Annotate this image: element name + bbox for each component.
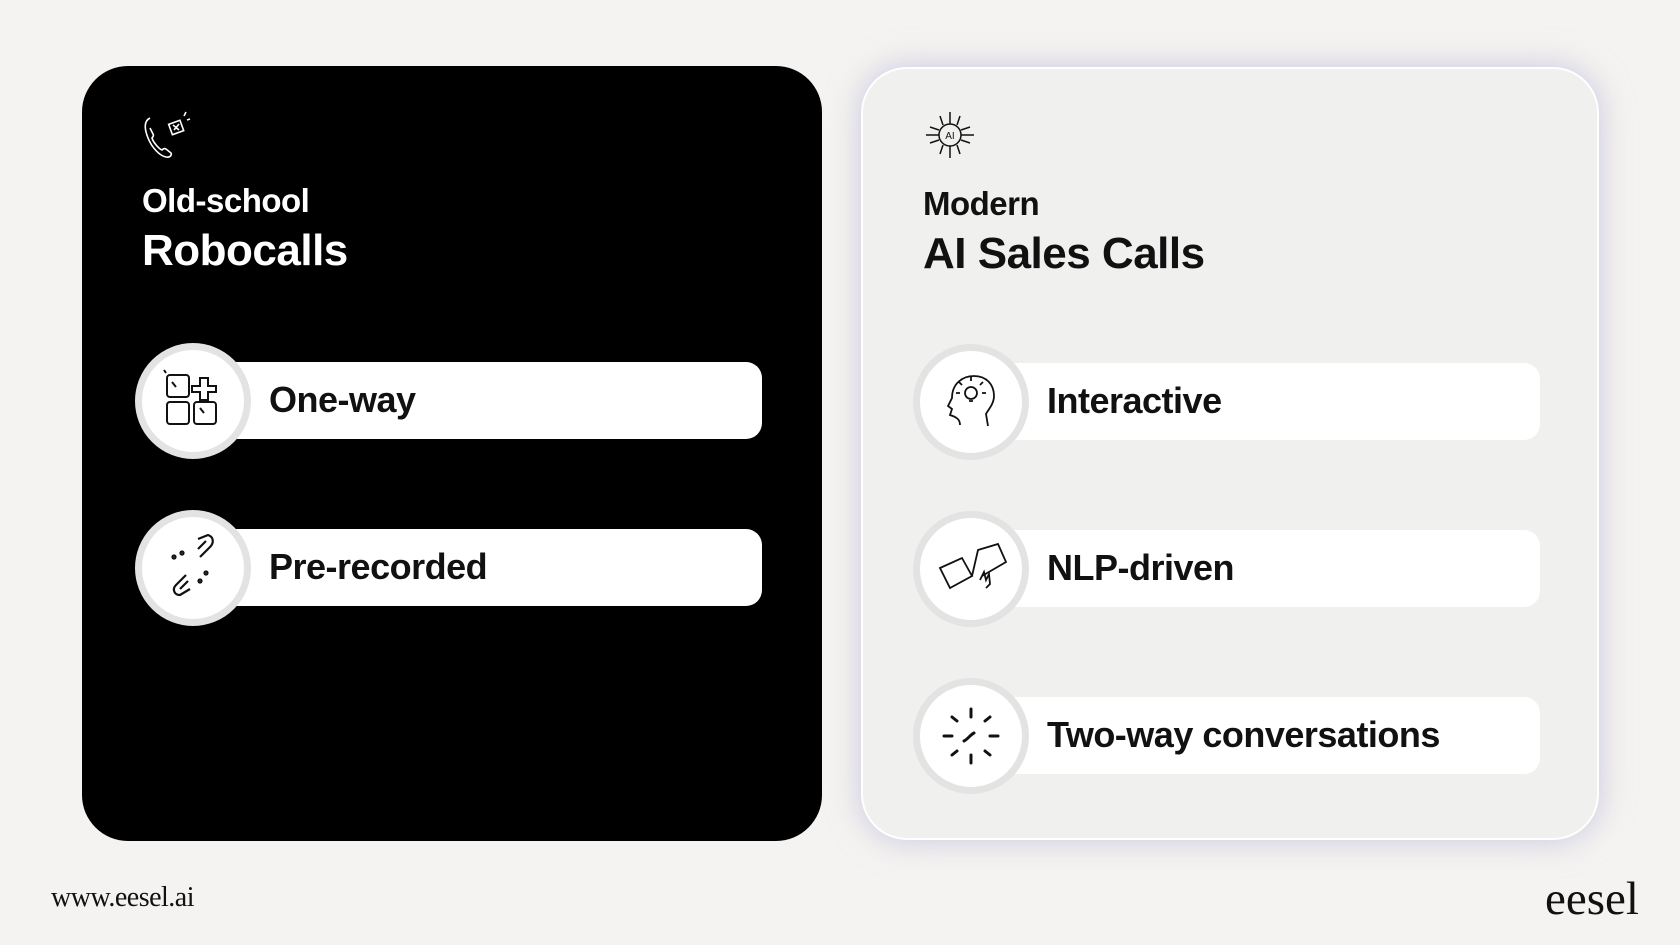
- footer logo: eesel: [1545, 873, 1639, 925]
- row: nlp-driven: NLP-driven: [1047, 547, 1234, 588]
- icon: open book: [913, 511, 1029, 627]
- heading: Modern: [923, 185, 1039, 222]
- row: pre-recorded: Pre-recorded: [269, 546, 487, 587]
- row: one-way: [135, 343, 762, 459]
- icon: head with bulb: [913, 344, 1029, 460]
- panel: old-school robocalls: [82, 66, 822, 841]
- icon: ai chip: [926, 112, 974, 158]
- icon: phone: [144, 112, 190, 158]
- footer url: www.eesel.ai: [51, 882, 194, 913]
- panel: modern ai sales calls: AI Sales Calls: [923, 229, 1205, 278]
- row: one-way: One-way: [269, 379, 416, 420]
- panel: old-school robocalls: Robocalls: [142, 226, 348, 275]
- row: two-way conversations: Two-way conversations: [1047, 714, 1440, 755]
- icon: blocks: [135, 343, 251, 459]
- row: pre-recorded: [135, 510, 762, 626]
- row: nlp-driven: [913, 511, 1540, 627]
- icon: ai chip: AI: [945, 131, 955, 142]
- icon: broken chain: [135, 510, 251, 626]
- row: interactive: [913, 344, 1540, 460]
- icon: sparkle burst: [913, 678, 1029, 794]
- heading: Old-school: [142, 182, 309, 219]
- row: two-way conversations: [913, 678, 1540, 794]
- panel: modern ai sales calls: [861, 67, 1599, 840]
- row: interactive: Interactive: [1047, 380, 1222, 421]
